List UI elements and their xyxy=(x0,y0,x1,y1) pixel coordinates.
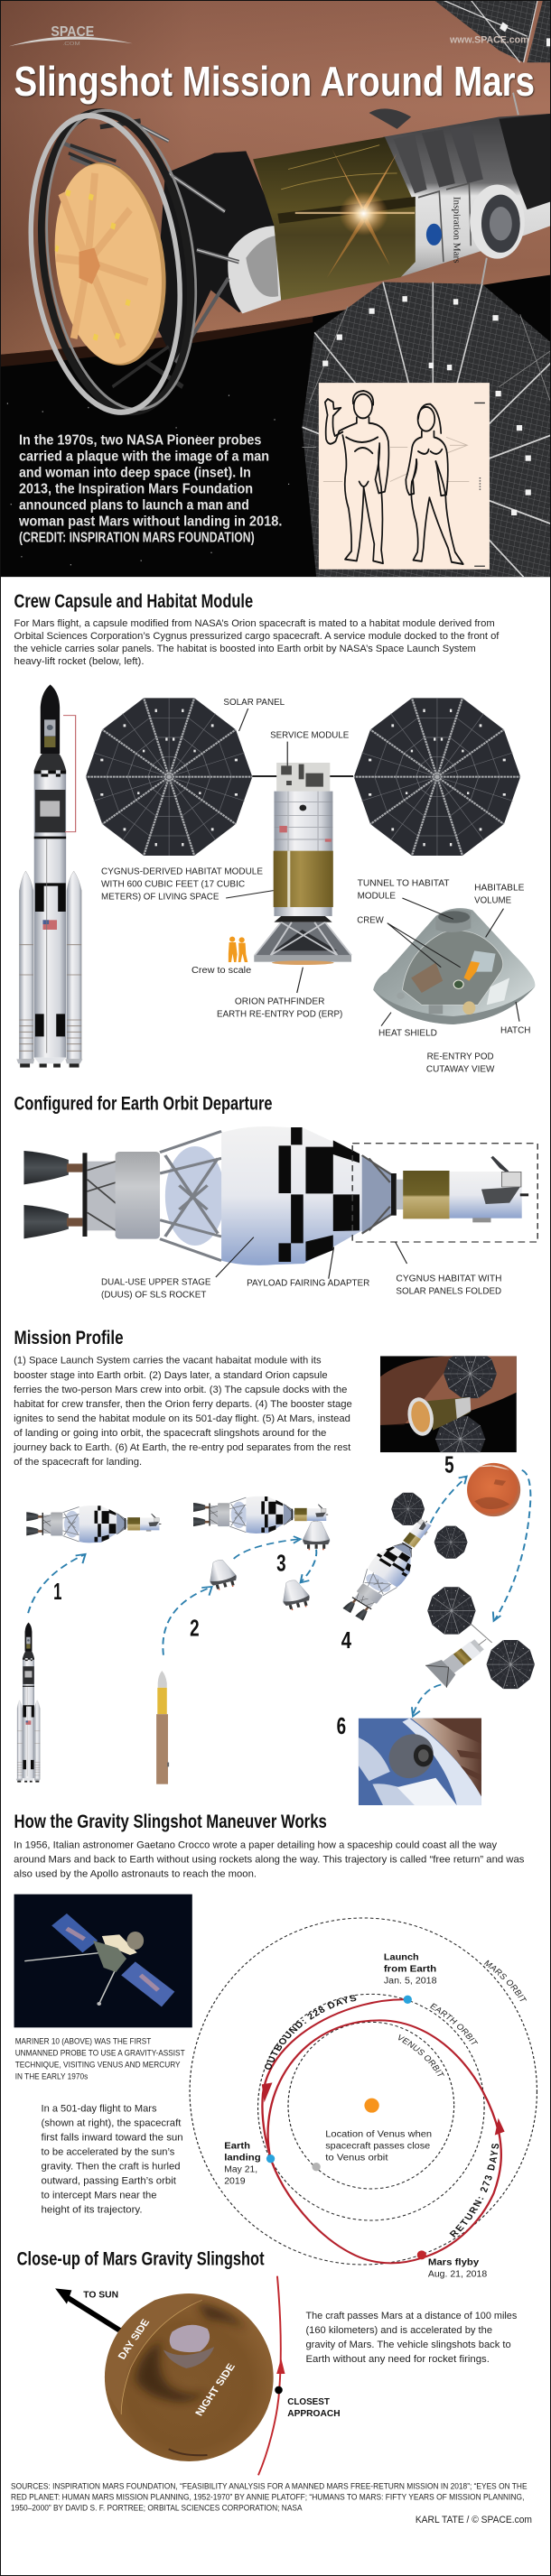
label: launch: Jan. 5, 2018 xyxy=(384,1976,437,1986)
label: heat shield: HEAT SHIELD xyxy=(378,1028,437,1038)
label: closest approach xyxy=(287,2397,341,2419)
caption: TECHNIQUE, VISITING VENUS AND MERCURY xyxy=(15,2061,181,2070)
panel: gravity slingshot xyxy=(14,1811,538,2279)
explanation text xyxy=(42,2103,183,2215)
explanation text: to be accelerated by the sun’s xyxy=(42,2146,174,2157)
label: tunnel xyxy=(358,878,450,901)
paragraph: of landing or going into orbit, the spacecraft slingshots around for the xyxy=(14,1427,327,1439)
panel: mission profile xyxy=(13,1326,535,1805)
paragraph xyxy=(305,2310,517,2365)
arrow to re-entry xyxy=(412,1684,441,1717)
solar panel right xyxy=(354,698,520,856)
dashed box: Cygnus habitat xyxy=(352,1144,537,1242)
paragraph: of the spacecraft for landing. xyxy=(14,1456,142,1468)
panel booms xyxy=(252,774,353,779)
arrow 3b xyxy=(301,1550,316,1582)
callout lines xyxy=(216,1237,406,1279)
paragraph: journey back to Earth. (6) At Earth, the re-entry pod separates from the rest xyxy=(13,1441,351,1453)
label: orion pathfinder: EARTH RE-ENTRY POD (ERP) xyxy=(217,1009,342,1019)
arrow 1 xyxy=(28,1554,86,1613)
label: Mars orbit: MARS ORBIT xyxy=(484,1960,528,2002)
intro paragraph: the vehicle carries solar panels. The habitat is boosted into Earth orbit by NASA’s Space Launch System xyxy=(14,643,476,654)
arrow to Mars xyxy=(431,1477,467,1523)
inset: Pioneer plaque figures xyxy=(319,383,490,570)
label: Venus location: spacecraft passes close xyxy=(325,2141,430,2151)
intro paragraph xyxy=(14,617,500,667)
sun xyxy=(364,2099,379,2113)
label: orion pathfinder: ORION PATHFINDER xyxy=(235,996,325,1006)
label: Mars flyby: Mars flyby xyxy=(428,2257,479,2267)
label: DUUS: DUAL-USE UPPER STAGE xyxy=(101,1277,210,1287)
step 3: stack xyxy=(193,1496,328,1534)
landing dot xyxy=(266,2154,275,2163)
label: landing: landing xyxy=(224,2153,261,2163)
label: habitat module xyxy=(101,866,263,902)
intro text: and woman into deep space (inset). In xyxy=(19,465,251,481)
explanation text: to intercept Mars near the xyxy=(42,2190,157,2201)
spacecraft: full stack xyxy=(23,1126,528,1265)
solar panel left xyxy=(86,698,252,856)
label: to sun: TO SUN xyxy=(83,2290,118,2300)
label: cutaway: CUTAWAY VIEW xyxy=(426,1064,495,1074)
capsule c xyxy=(277,1578,313,1612)
caption: UNMANNED PROBE TO USE A GRAVITY-ASSIST xyxy=(15,2049,185,2058)
logo: SPACE.com xyxy=(9,26,132,47)
logo: SPACE.com: .COM xyxy=(62,42,80,47)
arrow 2 xyxy=(163,1587,212,1655)
illustration: Mars close-up xyxy=(105,2293,274,2461)
panel: close-up of Mars slingshot xyxy=(11,2247,532,2525)
intro text: carried a plaque with the image of a man xyxy=(19,448,269,465)
sources: 1950–2000” BY DAVID S. F. PORTREE; ORBITAL SCIENCES CORPORATION; NASA xyxy=(11,2504,303,2513)
sources xyxy=(11,2482,528,2513)
photo: Mariner 10 xyxy=(14,1895,192,2027)
label: launch: Launch xyxy=(384,1952,419,1962)
label: return: RETURN: 273 DAYS xyxy=(450,2144,499,2238)
title: Slingshot Mission Around Mars xyxy=(14,60,535,106)
mars surface background xyxy=(0,0,551,355)
paragraph: (160 kilometers) and is accelerated by the xyxy=(305,2324,492,2336)
caption: IN THE EARLY 1970s xyxy=(15,2072,88,2081)
number 3: 3 xyxy=(276,1550,286,1576)
label: outbound: OUTBOUND: 228 DAYS xyxy=(265,1995,356,2070)
photo: re-entry xyxy=(359,1719,481,1805)
label: Earth orbit: EARTH ORBIT xyxy=(430,2003,479,2044)
number 2: 2 xyxy=(190,1615,200,1641)
label: night side: NIGHT SIDE xyxy=(193,2362,238,2418)
paragraph xyxy=(13,1354,352,1468)
closest approach dot xyxy=(275,2386,283,2394)
url: www.SPACE.com xyxy=(449,35,529,46)
label: Mars flyby xyxy=(428,2257,487,2279)
number 4: 4 xyxy=(341,1627,351,1654)
Venus dot xyxy=(312,2163,321,2171)
label: closest approach: CLOSEST xyxy=(287,2397,330,2407)
Mars flyby dot xyxy=(417,2250,426,2259)
paragraph: The craft passes Mars at a distance of 100 miles xyxy=(305,2310,517,2321)
label: DUUS: (DUUS) OF SLS ROCKET xyxy=(101,1290,207,1300)
label: landing: 2019 xyxy=(224,2176,246,2186)
heading: crew capsule: Crew Capsule and Habitat Module xyxy=(14,591,253,613)
intro text: (CREDIT: INSPIRATION MARS FOUNDATION) xyxy=(19,530,255,546)
intro paragraph: heavy-lift rocket (below, left). xyxy=(14,655,145,667)
label: day side: DAY SIDE xyxy=(117,2318,153,2361)
photo: craft at Mars xyxy=(379,1356,517,1453)
intro text xyxy=(18,432,282,546)
solar panel top right xyxy=(434,0,551,62)
paragraph: habitat for crew transfer, then the Orion ferry departs. (4) The booster stage xyxy=(14,1398,352,1410)
label: landing: Earth xyxy=(224,2141,250,2151)
label: Venus location: to Venus orbit xyxy=(325,2153,388,2163)
label: orion pathfinder xyxy=(217,996,342,1019)
label: Venus orbit: VENUS ORBIT xyxy=(398,2034,444,2076)
explanation text: outward, passing Earth’s orbit xyxy=(42,2175,177,2186)
chart: orbit diagram xyxy=(190,1917,538,2279)
label: Venus location: Location of Venus when xyxy=(325,2129,432,2139)
number 1: 1 xyxy=(53,1579,61,1605)
explanation text: In a 501-day flight to Mars xyxy=(42,2103,157,2114)
label: service module: SERVICE MODULE xyxy=(270,730,349,740)
explanation text: first falls inward toward the sun xyxy=(42,2132,183,2143)
heading: Configured for Earth Orbit Departure xyxy=(14,1092,272,1114)
label: habitable volume xyxy=(474,883,524,905)
paragraph: also used by the Apollo astronauts to reach the moon. xyxy=(14,1868,257,1879)
number 6: 6 xyxy=(337,1713,346,1739)
spacecraft: habitat stack xyxy=(254,763,351,965)
label: closest approach: APPROACH xyxy=(287,2409,341,2419)
arrow to Earth xyxy=(493,1470,530,1621)
label: solar panel: SOLAR PANEL xyxy=(223,698,285,708)
panel: crew capsule and habitat module xyxy=(14,617,535,1074)
illustration: spacecraft xyxy=(12,93,551,426)
caption: MARINER 10 (ABOVE) WAS THE FIRST xyxy=(15,2037,151,2046)
bracket xyxy=(63,716,76,832)
solar panel lower right xyxy=(303,283,551,577)
trajectory xyxy=(262,1999,501,2263)
label: crew to scale: Crew to scale xyxy=(191,966,251,976)
capsule b xyxy=(303,1521,330,1550)
label: payload fairing adapter: PAYLOAD FAIRING ADAPTER xyxy=(247,1278,369,1288)
arrow: to sun xyxy=(55,2288,119,2330)
step 1: stack in orbit xyxy=(26,1506,161,1543)
number 5: 5 xyxy=(444,1451,454,1478)
Mars globe xyxy=(467,1463,520,1516)
trajectory xyxy=(258,2276,281,2475)
callout lines xyxy=(226,709,519,1026)
label: Venus location xyxy=(325,2129,432,2163)
arrowhead return xyxy=(495,2118,505,2136)
rocket: Space Launch System xyxy=(16,684,82,1068)
label: tunnel: TUNNEL TO HABITAT xyxy=(358,878,450,888)
paragraph: Earth without any need for rocket firings. xyxy=(305,2353,490,2365)
heading: Mission Profile xyxy=(14,1326,124,1348)
label: habitable volume: HABITABLE xyxy=(474,883,524,893)
woman figure xyxy=(406,404,463,564)
label: tunnel: MODULE xyxy=(358,891,396,901)
launch dot xyxy=(404,1996,412,2004)
label: cutaway: RE-ENTRY POD xyxy=(427,1052,494,1061)
label: Cygnus habitat: CYGNUS HABITAT WITH xyxy=(396,1274,502,1283)
label: cutaway xyxy=(426,1052,495,1074)
paragraph xyxy=(14,1839,524,1879)
intro text: woman past Mars without landing in 2018. xyxy=(18,514,282,530)
step 6: craft with panels xyxy=(425,1587,535,1689)
heading: Close-up of Mars Gravity Slingshot xyxy=(17,2247,265,2269)
label: DUUS xyxy=(101,1277,210,1300)
paragraph: booster stage into Earth orbit. (2) Days later, a standard Orion capsule xyxy=(14,1369,328,1381)
caption xyxy=(15,2037,185,2081)
label: habitable volume: VOLUME xyxy=(474,895,511,905)
paragraph: ignites to send the habitat module on its 501-day flight. (5) At Mars, instead xyxy=(14,1413,350,1424)
intro text: announced plans to launch a man and xyxy=(19,497,249,514)
label: landing xyxy=(224,2141,261,2186)
label: Cygnus habitat xyxy=(396,1274,502,1296)
step 2: Orion launch rocket xyxy=(156,1671,169,1784)
label: habitat module: WITH 600 CUBIC FEET (17 CUBIC xyxy=(101,879,245,889)
arrow 3 xyxy=(234,1536,301,1559)
step 1: SLS rocket xyxy=(16,1622,41,1783)
intro text: In the 1970s, two NASA Pioneer probes xyxy=(19,432,261,449)
label: launch xyxy=(384,1952,437,1986)
step 4: stack rotated with panels xyxy=(337,1493,468,1625)
label: Cygnus habitat: SOLAR PANELS FOLDED xyxy=(396,1286,501,1296)
label: habitat module: METERS) OF LIVING SPACE xyxy=(101,892,219,902)
intro paragraph: For Mars flight, a capsule modified from NASA’s Orion spacecraft is mated to a habitat module derived from xyxy=(14,617,495,629)
illustration: spacecraft: Inspiration Mars xyxy=(452,197,462,264)
label: launch: from Earth xyxy=(384,1964,436,1974)
logo: SPACE.com: SPACE xyxy=(51,23,94,40)
illustration: re-entry pod cutaway xyxy=(373,908,535,1024)
label: hatch: HATCH xyxy=(500,1025,530,1035)
paragraph: gravity of Mars. The vehicle slingshots back to xyxy=(305,2339,511,2350)
man figure xyxy=(325,391,388,563)
intro text: 2013, the Inspiration Mars Foundation xyxy=(19,481,253,497)
explanation text: height of its trajectory. xyxy=(42,2204,143,2215)
heading: How the Gravity Slingshot Maneuver Works xyxy=(14,1811,327,1832)
arrowhead xyxy=(276,2358,285,2374)
hero panel xyxy=(0,0,551,577)
panel: configured for Earth orbit departure xyxy=(14,1092,537,1300)
capsule a xyxy=(205,1557,239,1591)
arrowhead outbound xyxy=(262,2082,272,2102)
explanation text: (shown at right), the spacecraft xyxy=(42,2117,182,2128)
paragraph: ferries the two-person Mars crew into orbit. (3) The capsule docks with the xyxy=(14,1384,348,1395)
label: landing: May 21, xyxy=(224,2164,257,2174)
explanation text: gravity. Then the craft is hurled xyxy=(42,2161,181,2172)
label: Mars flyby: Aug. 21, 2018 xyxy=(428,2269,487,2279)
label: crew: CREW xyxy=(357,915,384,925)
label: habitat module: CYGNUS-DERIVED HABITAT MODULE xyxy=(101,866,263,876)
paragraph: (1) Space Launch System carries the vacant habaitat module with its xyxy=(14,1354,322,1366)
icon: crew to scale xyxy=(229,937,247,962)
